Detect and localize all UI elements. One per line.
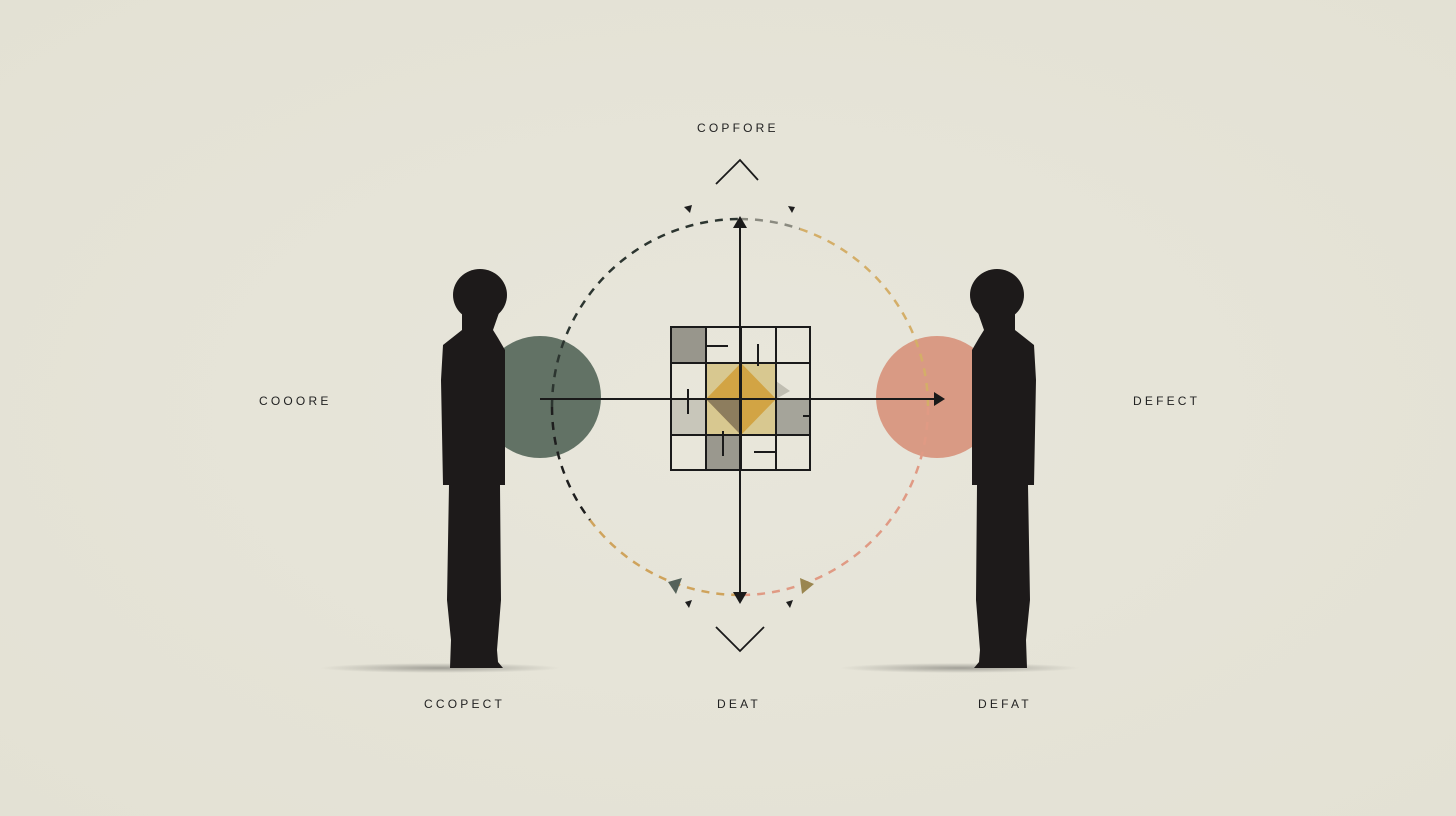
dashed cycle ring: [552, 219, 928, 595]
circle: cooperate (green): [479, 336, 601, 458]
chevrons: [716, 160, 764, 651]
label: bottom right: DEFAT: [978, 697, 1032, 711]
circle: defect (salmon): [876, 336, 998, 458]
label: left: COOORE: [259, 394, 332, 408]
figure: right (defector): [970, 269, 1036, 668]
label: bottom center: DEAT: [717, 697, 761, 711]
axes arrows: [540, 216, 945, 604]
label: right: DEFECT: [1133, 394, 1200, 408]
shadows: [320, 663, 1080, 673]
figure: left (cooperator): [441, 269, 507, 668]
label: top: COPFORE: [697, 121, 779, 135]
small arrowheads on ring: [668, 205, 814, 608]
grid: [671, 327, 810, 470]
label: bottom left: CCOPECT: [424, 697, 505, 711]
